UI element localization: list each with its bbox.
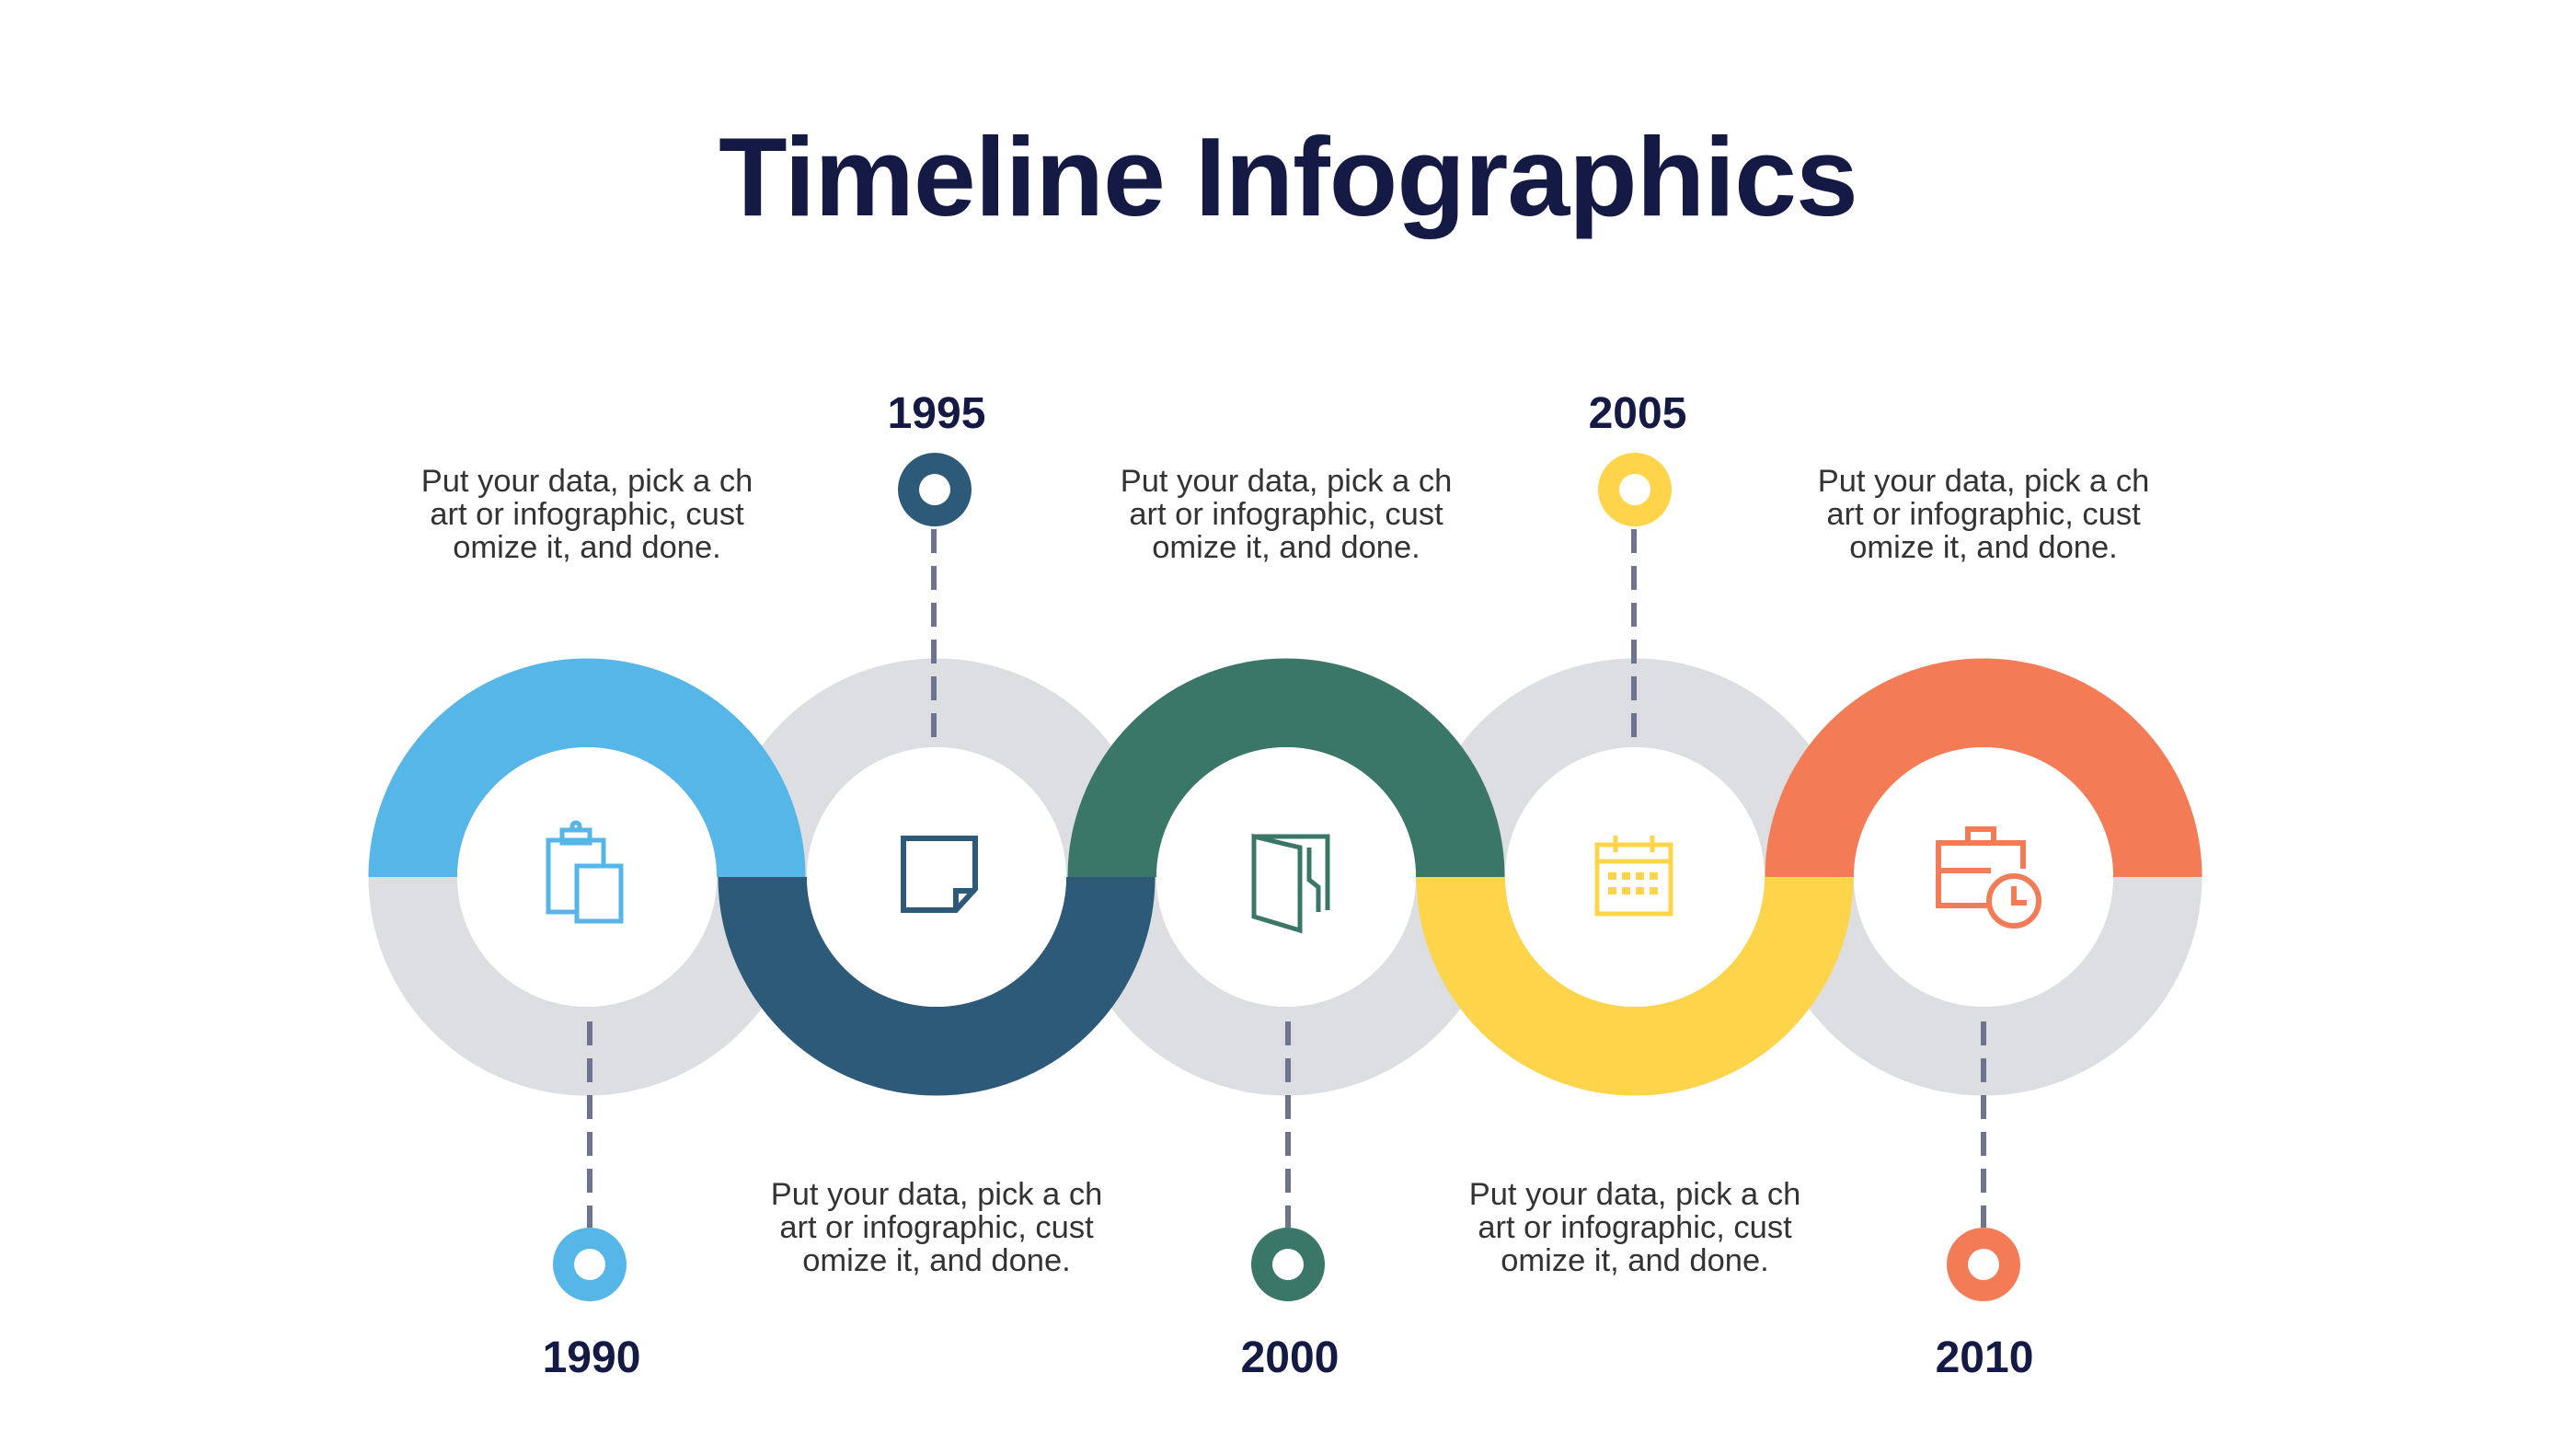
text blocks: Put your data, pick a ch (421, 464, 753, 499)
ring 1990 blue top (413, 703, 761, 877)
ring 1995 dark blue bottom (763, 877, 1110, 1051)
gray rings (413, 703, 2157, 1051)
text blocks: omize it, and done. (453, 530, 721, 565)
text blocks (421, 464, 2149, 1278)
icon: door (1254, 837, 1328, 930)
icon: briefcase clock (1938, 829, 2039, 926)
text blocks: art or infographic, cust (430, 497, 744, 532)
text blocks: omize it, and done. (1849, 530, 2118, 565)
icon: note (903, 838, 975, 910)
years: 1990 (543, 1333, 640, 1382)
ring 2010 orange top (1810, 703, 2157, 877)
text blocks: omize it, and done. (802, 1243, 1071, 1278)
years: 2010 (1936, 1333, 2033, 1382)
dashed connectors (590, 529, 1984, 1228)
years: 2005 (1589, 389, 1686, 438)
title: Timeline Infographics (719, 114, 1857, 239)
text blocks: art or infographic, cust (779, 1210, 1094, 1245)
ring 2005 yellow bottom (1461, 877, 1809, 1051)
icon: calendar (1597, 836, 1671, 914)
text blocks: art or infographic, cust (1478, 1210, 1792, 1245)
text blocks: Put your data, pick a ch (771, 1177, 1102, 1212)
inner white circles (457, 747, 2113, 1007)
text blocks: Put your data, pick a ch (1469, 1177, 1800, 1212)
text blocks: Put your data, pick a ch (1121, 464, 1452, 499)
text blocks: omize it, and done. (1152, 530, 1420, 565)
pins (553, 453, 2020, 1301)
icon: clipboard (548, 823, 621, 921)
text blocks: art or infographic, cust (1129, 497, 1443, 532)
years: 2000 (1241, 1333, 1339, 1382)
years (543, 389, 2033, 1382)
text blocks: omize it, and done. (1501, 1243, 1769, 1278)
ring 2000 green top (1112, 703, 1460, 877)
text blocks: art or infographic, cust (1826, 497, 2141, 532)
years: 1995 (888, 389, 985, 438)
text blocks: Put your data, pick a ch (1818, 464, 2149, 499)
